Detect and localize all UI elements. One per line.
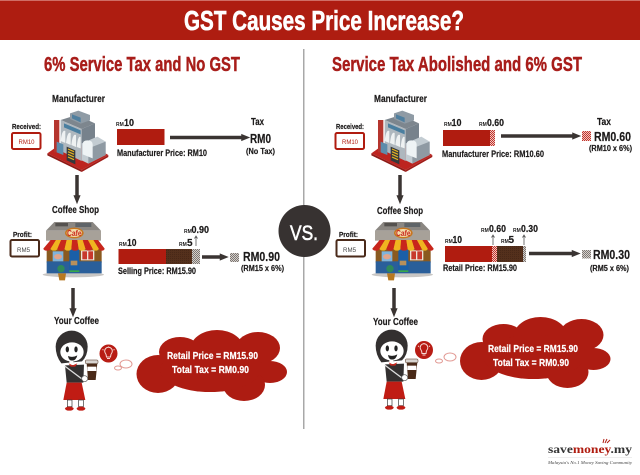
icon: light bulb bbox=[415, 341, 433, 359]
title: GST Causes Price Increase? bbox=[184, 5, 464, 36]
received box: RM10 bbox=[342, 139, 358, 146]
callout cloud: Total Tax = RM0.90 bbox=[172, 364, 249, 376]
received box bbox=[12, 122, 41, 149]
profit box: Profit: bbox=[339, 230, 358, 239]
profit box: RM5 bbox=[17, 247, 30, 254]
tax result: (No Tax) bbox=[246, 147, 275, 156]
icon: woman with coffee bbox=[376, 330, 418, 410]
manufacturer cost bar: Manufacturer Price: RM10 bbox=[117, 148, 207, 158]
callout cloud: Retail Price = RM15.90 bbox=[488, 343, 578, 355]
arrow: down to your coffee bbox=[393, 288, 395, 312]
profit box: Profit: bbox=[13, 230, 32, 239]
retail price bar: RM bbox=[501, 239, 509, 245]
icon: factory bbox=[371, 111, 432, 172]
retail price bar bbox=[443, 224, 538, 273]
selling price bar: RM bbox=[119, 242, 127, 248]
manufacturer cost bar bbox=[116, 118, 207, 158]
thought puffs bbox=[114, 360, 132, 370]
icon: coffee shop: Cafe bbox=[67, 228, 82, 238]
VS badge: VS. bbox=[290, 222, 318, 245]
selling price bar: RM bbox=[184, 229, 192, 235]
manufacturer cost bar: 10 bbox=[452, 118, 462, 129]
arrow: to tax bbox=[501, 135, 576, 137]
received box: Received: bbox=[336, 122, 364, 131]
received box bbox=[336, 122, 364, 149]
icon: coffee shop: Cafe bbox=[396, 228, 411, 238]
retail price bar: RM bbox=[445, 239, 453, 245]
tax amount: (RM15 x 6%) bbox=[241, 264, 284, 273]
tax result: Tax bbox=[597, 117, 611, 128]
tax result: (RM10 x 6%) bbox=[589, 144, 632, 153]
manufacturer cost bar: 0.60 bbox=[487, 118, 504, 129]
manufacturer cost bar: RM bbox=[116, 122, 124, 128]
your coffee label: Your Coffee bbox=[54, 316, 99, 327]
arrow: down to coffee shop bbox=[76, 175, 78, 200]
icon: woman with coffee bbox=[56, 331, 98, 411]
callout cloud bbox=[136, 330, 287, 401]
arrow: down to your coffee bbox=[72, 288, 74, 312]
received box: RM10 bbox=[18, 139, 35, 146]
callout cloud: Total Tax = RM0.90 bbox=[493, 357, 569, 369]
coffee shop label: Coffee Shop bbox=[377, 206, 423, 217]
tax result: RM0 bbox=[250, 131, 271, 146]
tax result bbox=[246, 117, 275, 156]
arrow: to tax amount bbox=[529, 252, 576, 254]
callout cloud: Retail Price = RM15.90 bbox=[167, 350, 258, 362]
panel: service tax abolished and 6% GST bbox=[332, 54, 632, 410]
icon: factory bbox=[47, 111, 108, 172]
manufacturer cost bar: RM bbox=[479, 122, 487, 128]
manufacturer cost bar: 10 bbox=[124, 118, 134, 129]
header banner bbox=[0, 0, 640, 40]
manufacturer cost bar: RM bbox=[444, 122, 452, 128]
retail price bar: RM bbox=[481, 228, 489, 234]
selling price bar: 10 bbox=[127, 238, 137, 249]
retail price bar: 5 bbox=[508, 235, 514, 246]
icon: light bulb bbox=[100, 344, 118, 362]
profit box bbox=[336, 230, 365, 256]
tax amount: (RM5 x 6%) bbox=[590, 264, 629, 273]
selling price bar bbox=[118, 225, 209, 276]
selling price bar: 5 bbox=[187, 238, 193, 249]
manufacturer cost bar: Manufacturer Price: RM10.60 bbox=[442, 149, 544, 159]
retail price bar: 0.60 bbox=[489, 224, 506, 235]
tax amount bbox=[582, 247, 630, 273]
manufacturer cost bar bbox=[442, 118, 544, 159]
arrow: down to coffee shop bbox=[399, 175, 401, 200]
selling price bar: Selling Price: RM15.90 bbox=[118, 266, 196, 276]
logo: savemoney.my: save money .my bbox=[548, 444, 632, 456]
arrow: to tax bbox=[170, 136, 246, 138]
profit box: RM5 bbox=[343, 247, 356, 254]
tax amount bbox=[230, 249, 284, 273]
logo: savemoney.my bbox=[547, 439, 632, 465]
retail price bar: Retail Price: RM15.90 bbox=[443, 263, 517, 273]
tax amount: RM0.90 bbox=[243, 249, 280, 264]
retail price bar: RM bbox=[513, 228, 521, 234]
retail price bar: 10 bbox=[452, 235, 462, 246]
arrow: to tax amount bbox=[202, 256, 224, 258]
icon: coffee shop bbox=[372, 222, 434, 280]
coffee shop label: Coffee Shop bbox=[52, 205, 99, 216]
callout cloud bbox=[460, 317, 610, 388]
received box: Received: bbox=[12, 122, 41, 131]
tax result: Tax bbox=[251, 117, 264, 128]
profit box bbox=[10, 230, 39, 256]
manufacturer label: Manufacturer bbox=[52, 94, 105, 105]
tax result bbox=[582, 117, 632, 153]
retail price bar: 0.30 bbox=[521, 224, 538, 235]
icon: coffee shop bbox=[43, 222, 105, 280]
manufacturer label: Manufacturer bbox=[374, 94, 427, 105]
panel: 6% service tax and no GST bbox=[10, 54, 287, 411]
logo: savemoney.my: Malaysia's No.1 Money Saving Community bbox=[547, 460, 632, 465]
your coffee label: Your Coffee bbox=[373, 317, 418, 328]
centre divider bbox=[303, 49, 304, 429]
VS badge bbox=[278, 205, 330, 257]
left heading: 6% Service Tax and No GST bbox=[44, 54, 240, 76]
tax amount: RM0.30 bbox=[593, 247, 630, 262]
selling price bar: 0.90 bbox=[192, 225, 209, 236]
selling price bar: RM bbox=[179, 242, 187, 248]
tax result: RM0.60 bbox=[594, 129, 631, 144]
thought puffs bbox=[436, 353, 456, 363]
